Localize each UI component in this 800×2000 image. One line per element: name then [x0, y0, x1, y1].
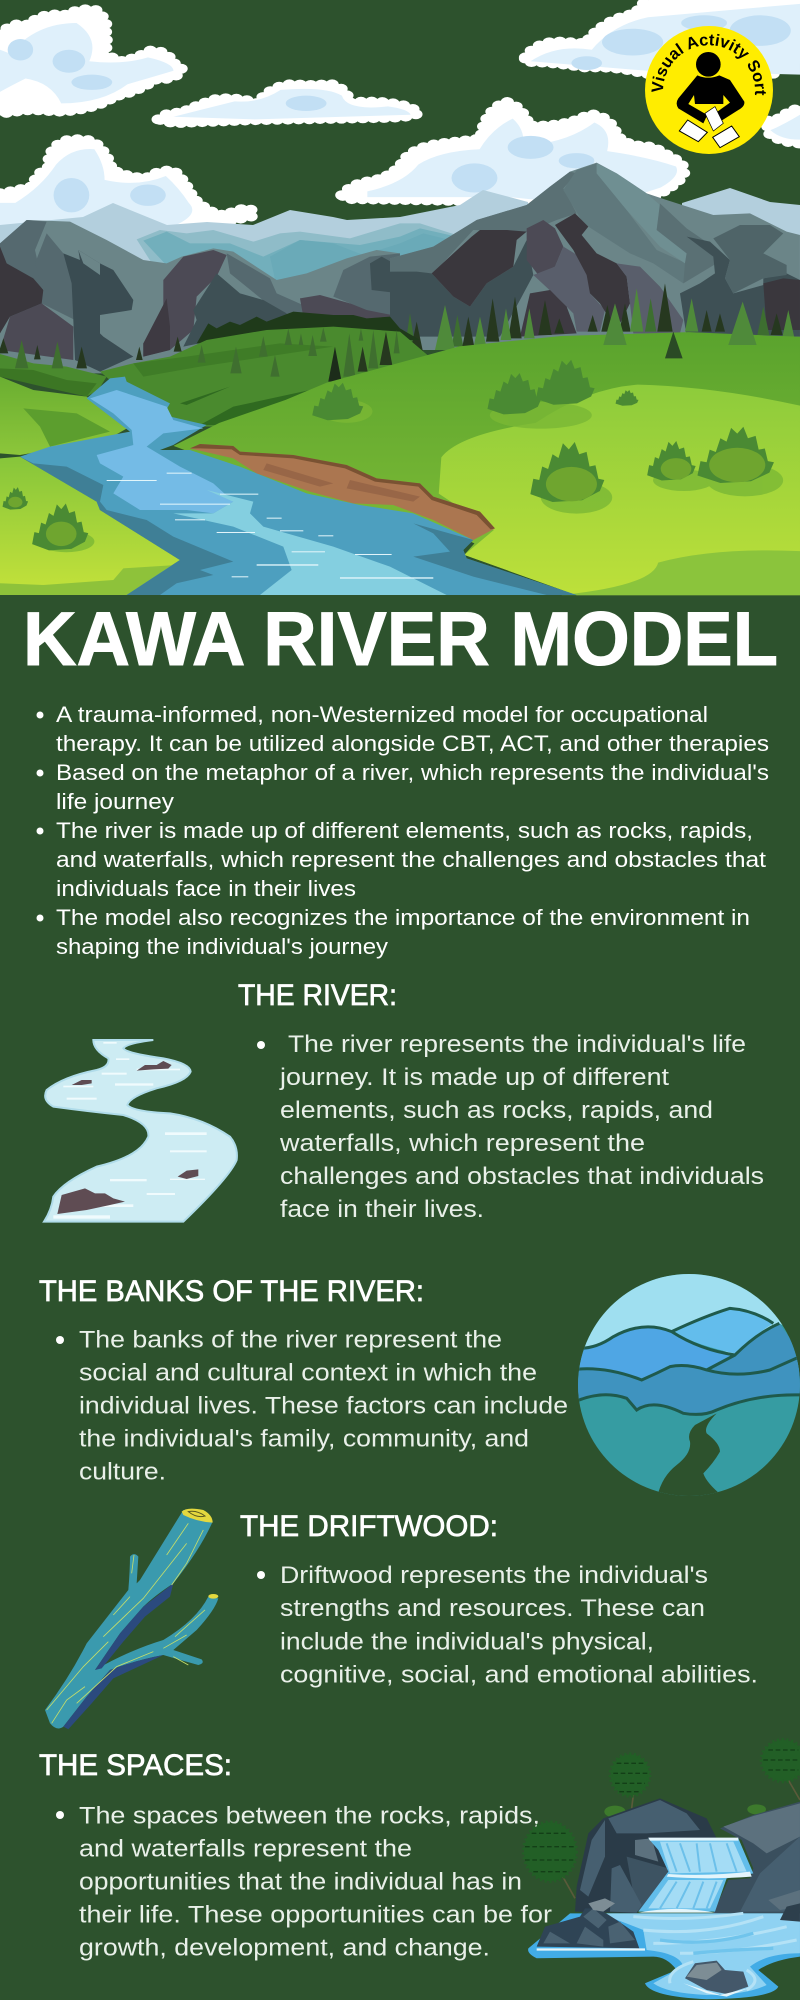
heading: the river: THE RIVER:	[238, 979, 397, 1012]
driftwood text: strengths and resources. These can	[280, 1595, 705, 1622]
river	[20, 377, 577, 595]
river text: waterfalls, which represent the	[279, 1130, 645, 1157]
icon: winding river	[44, 1040, 237, 1222]
intro bullet list: The model also recognizes the importance of the environment in	[56, 905, 750, 930]
banks text: The banks of the river represent the	[79, 1326, 502, 1354]
intro bullet list	[36, 702, 769, 959]
river text: elements, such as rocks, rapids, and	[280, 1097, 713, 1124]
banks text	[56, 1326, 568, 1486]
river text	[257, 1031, 764, 1223]
forested mid hills	[0, 312, 433, 427]
spaces text: and waterfalls represent the	[79, 1836, 412, 1862]
left mountains	[0, 220, 400, 373]
landscape illustration: clouds, mountains, hills and river	[0, 0, 800, 595]
driftwood text: Driftwood represents the individual's	[280, 1562, 708, 1589]
eroded brown riverbank	[190, 444, 495, 540]
tree line on the far ridge	[403, 283, 794, 358]
waterfall	[638, 1838, 753, 1913]
main peak mountains	[390, 163, 800, 350]
intro bullet list: and waterfalls, which represent the challenges and obstacles that	[56, 847, 767, 872]
driftwood text	[257, 1562, 758, 1688]
river text: The river represents the individual's life	[288, 1031, 746, 1058]
spaces text: growth, development, and change.	[79, 1934, 490, 1962]
lower mid hill and wedges by the river	[127, 377, 327, 427]
banks text: the individual's family, community, and	[79, 1426, 529, 1452]
driftwood text: cognitive, social, and emotional abilities.	[280, 1662, 758, 1688]
intro bullet list: therapy. It can be utilized alongside CBT, ACT, and other therapies	[56, 731, 769, 756]
banks text: individual lives. These factors can include	[79, 1392, 568, 1420]
river text: journey. It is made up of different	[279, 1064, 669, 1091]
distant mountain ridge	[0, 188, 800, 340]
intro bullet list: individuals face in their lives	[56, 876, 356, 901]
bushes	[3, 360, 783, 552]
clouds	[0, 0, 800, 253]
banks text: social and cultural context in which the	[79, 1360, 537, 1386]
title: KAWA RIVER MODEL	[23, 597, 778, 682]
icon: driftwood branch	[45, 1509, 218, 1729]
intro bullet list: A trauma-informed, non-Westernized model for occupational	[56, 702, 708, 727]
spaces text: The spaces between the rocks, rapids,	[79, 1802, 540, 1830]
badge: Visual Activity Sort	[645, 26, 773, 154]
boulders	[537, 1898, 800, 1997]
pool	[528, 1913, 800, 1999]
badge label: Visual Activity Sort	[651, 34, 766, 96]
icon: circular valley landscape	[570, 1270, 800, 1503]
rock cliffs	[575, 1798, 800, 1913]
trees	[524, 1740, 800, 1898]
intro bullet list: The river is made up of different elements, such as rocks, rapids,	[56, 818, 753, 843]
river text: challenges and obstacles that individuals	[280, 1163, 764, 1190]
heading: the spaces: THE SPACES:	[39, 1749, 232, 1782]
spaces text	[56, 1802, 552, 1962]
left meadows	[0, 377, 180, 595]
heading: the banks of the river: THE BANKS OF THE RIVER:	[39, 1275, 424, 1308]
icon: person sorting cards	[677, 52, 744, 148]
intro bullet list: shaping the individual's journey	[56, 934, 389, 959]
spaces text: opportunities that the individual has in	[79, 1868, 522, 1896]
intro bullet list: life journey	[56, 789, 175, 814]
illustration: waterfall with rocks and trees	[524, 1740, 800, 1999]
spaces text: their life. These opportunities can be for	[79, 1902, 552, 1928]
heading: the driftwood: THE DRIFTWOOD:	[240, 1510, 498, 1543]
river text: face in their lives.	[280, 1196, 484, 1223]
driftwood text: include the individual's physical,	[280, 1628, 654, 1656]
mid blue ridges	[137, 223, 457, 287]
foreground conifers on meadow	[603, 302, 757, 358]
intro bullet list: Based on the metaphor of a river, which represents the individual's	[56, 760, 769, 785]
banks text: culture.	[79, 1458, 166, 1486]
right meadow	[173, 332, 800, 595]
